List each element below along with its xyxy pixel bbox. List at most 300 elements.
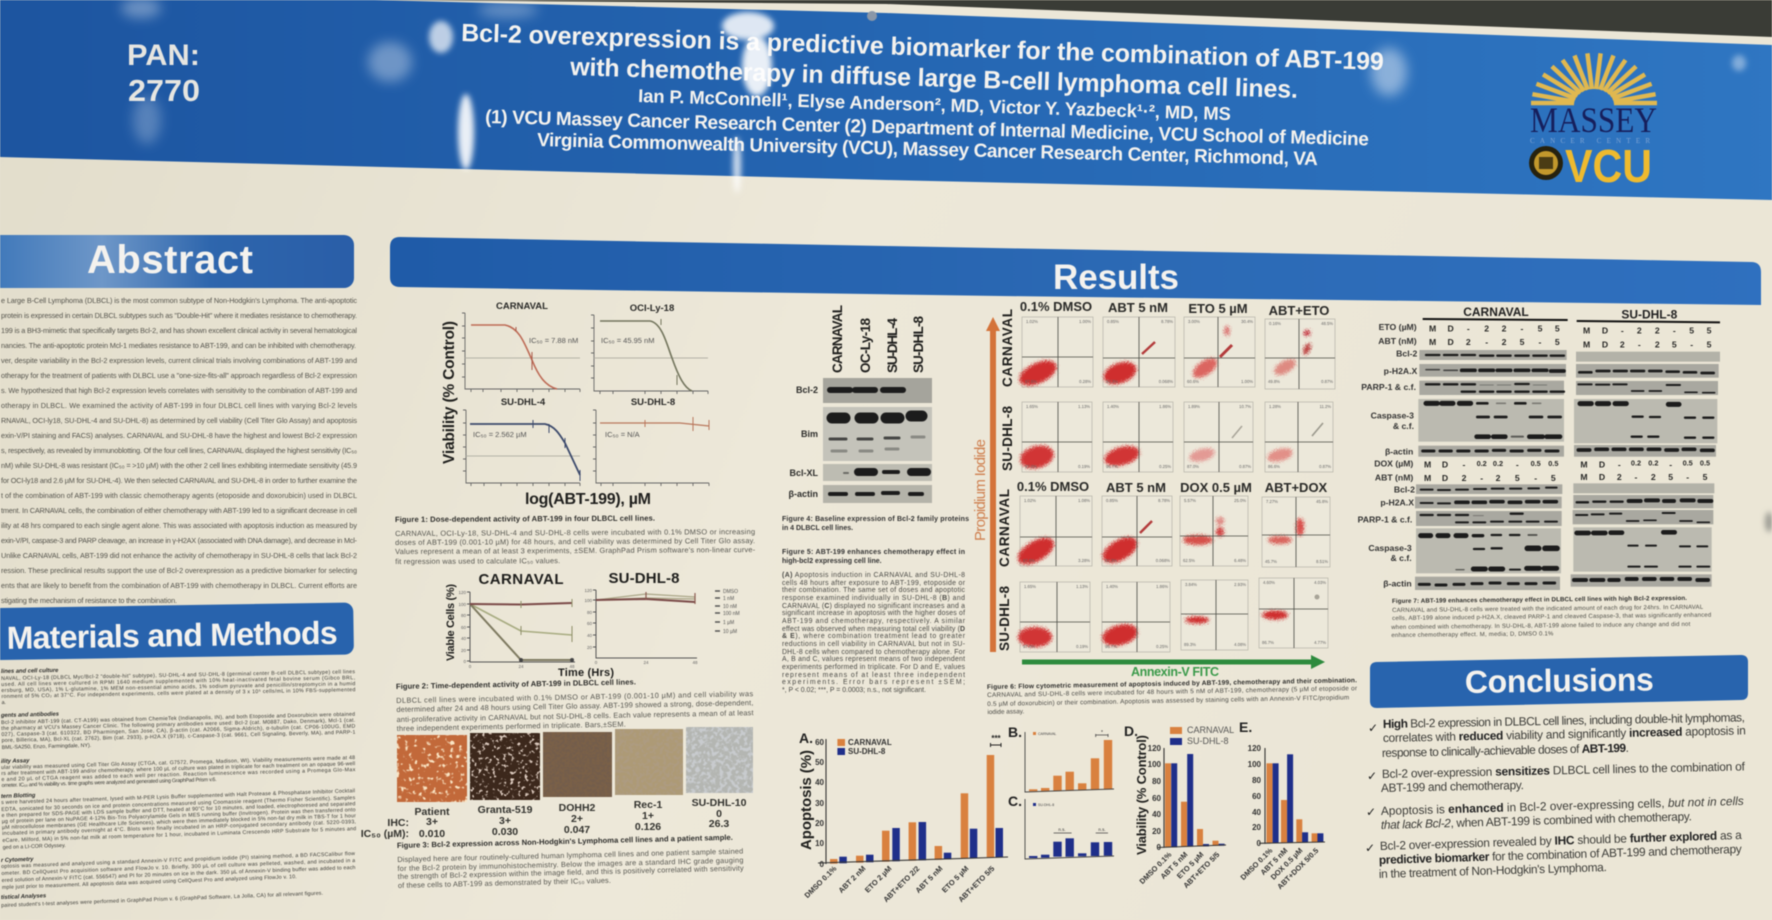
chart: CARNAVAL time course: CARNAVAL	[478, 571, 564, 588]
chart: CARNAVAL time course: 40	[461, 636, 466, 641]
legend	[837, 738, 892, 756]
y ticks: 120	[1148, 744, 1162, 753]
conclusion 2: ABT-199 and chemotherapy.	[1381, 778, 1524, 795]
conference abstract number: PAN:	[127, 39, 200, 72]
top row labels: ABT (nM)	[1378, 336, 1417, 346]
title banner	[0, 0, 1772, 200]
bands top left	[1423, 355, 1564, 451]
IHC image: Granta-519	[470, 733, 540, 800]
group headers: SU-DHL-8	[1621, 307, 1678, 321]
methods: reagents: BML-SA250, Enzo, Farmingdale, NY).	[2, 743, 91, 751]
legend	[715, 589, 740, 635]
plot: CARNAVAL ABT DOX row: 82.3%	[1105, 558, 1117, 563]
plot: CARNAVAL DOX: 25.0%	[1234, 498, 1246, 503]
plot: CARNAVAL ABT+DOX	[1262, 497, 1330, 567]
plot: CARNAVAL DMSO ETO row: 1.02%	[1026, 319, 1038, 324]
chart: CARNAVAL time course: 0	[469, 664, 472, 669]
methods: flow cytometry: optosis was measured and analyzed using a standard Annexin-V FITC and propidium iodide (PI) staining method, a BD FACSCalibur flow	[1, 851, 355, 870]
figure 6: flow cytometry	[972, 299, 1358, 716]
plot: CARNAVAL ABT+DOX: 7.27%	[1266, 499, 1278, 504]
figure 5 description: & E), where combination treatment lead to greater	[782, 633, 966, 640]
plot: CARNAVAL DMSO ETO row: 0.28%	[1079, 379, 1091, 384]
chart: CARNAVAL time course	[458, 571, 575, 669]
bottom drug dose table: 0.2	[1493, 459, 1503, 468]
legend: 10 nM	[723, 604, 737, 610]
plot: SU-DHL-8 ETO: 10.7%	[1239, 404, 1251, 409]
figure 4 caption: in 4 DLBCL cell lines.	[782, 525, 853, 532]
methods: cell lines: NAVAL, OCI-Ly-18 (DLBCL Myc/Bcl-2 "double-hit" subtype), SU-DHL-4 and SU-DHL-8 (germinal center B-cell DLBCL subtype) cell lines	[1, 669, 355, 682]
bottom row labels: p-H2A.X	[1380, 498, 1414, 508]
bottom drug dose table: 0.2	[1648, 459, 1658, 468]
x labels: DOX 0.5 µM	[1269, 846, 1304, 882]
bottom drug dose table	[1424, 459, 1710, 483]
abstract body text: Unlike CARNAVAL cells, ABT-199 did not enhance the activity of chemotherapy in SU-DHL-8 cells that lack Bcl-2	[1, 551, 357, 560]
IHC table labels: 0	[716, 808, 722, 820]
plot: CARNAVAL ABT+DOX: 8.51%	[1316, 559, 1328, 564]
abstract body text: nancies. The anti-apoptotic protein Mcl-1 mediates resistance to ABT-199, and can be inhibited with chemotherapy.	[1, 341, 356, 350]
conclusion 4: Bcl-2 over-expression revealed by IHC should be further explored as a	[1380, 828, 1742, 853]
figure 3 caption: the strength of Bcl-2 expression within the image field, and this is positively correlated with sensitivity	[398, 864, 744, 881]
plot: CARNAVAL ABT: 92.3%	[1106, 379, 1118, 384]
bottom row labels: PARP-1 & c.f.	[1358, 515, 1412, 525]
y ticks: 100	[1148, 760, 1162, 769]
check marks: ✓	[1367, 769, 1377, 783]
top row labels: β-actin	[1385, 446, 1413, 456]
y ticks: 0	[820, 860, 825, 869]
chart: SU-DHL-8 time course: 20	[587, 645, 592, 650]
heading: conclusions: Conclusions	[1465, 661, 1654, 700]
figure 3 caption: for the Bcl-2 protein by immunohistochemistry. Below the images are a standard IHC grade gauging	[397, 856, 744, 873]
plot: CARNAVAL ABT DOX row: 8.78%	[1158, 498, 1170, 503]
check marks: ✓	[1365, 841, 1375, 855]
methods: flow cytometry: mple just prior to measurement. All apoptosis data was acquired using CellQuest Pro and analyzed using FlowJo v. 10.	[2, 874, 297, 891]
y ticks: 0	[1257, 839, 1262, 848]
dark wall behind poster	[375, 0, 1772, 37]
figure 4 caption: Figure 4: Baseline expression of Bcl-2 family proteins	[782, 516, 969, 523]
blot: Bim	[823, 407, 932, 461]
legend: DMSO	[723, 589, 738, 595]
poster title: Bcl-2 overexpression is a predictive biomarker for the combination of ABT-199	[461, 19, 1384, 76]
plot: CARNAVAL ABT DOX row: 0.068%	[1156, 558, 1170, 563]
plot: CARNAVAL DOX: 6.48%	[1234, 558, 1246, 563]
methods: western blotting: tern Blotting	[1, 793, 36, 800]
plot: SU-DHL-8 DOX: 89.3%	[1184, 642, 1196, 647]
figure 5 description: cells 48 hours after exposure to ABT-199, etoposide or	[782, 580, 966, 587]
heading: conclusions	[1370, 655, 1748, 708]
chart: SU-DHL-4: SU-DHL-4	[501, 397, 546, 408]
conclusion 1: response to clinically-achievable doses of ABT-199.	[1382, 741, 1629, 760]
bottom drug dose table: 0.5	[1683, 459, 1693, 468]
plot: SU-DHL-8 ETO	[1184, 402, 1253, 472]
plot: SU-DHL-8 ETO: 1.89%	[1188, 404, 1200, 409]
blot: Bcl-2	[823, 378, 932, 403]
legend: 100 nM	[723, 611, 740, 617]
x axis label: log(ABT-199), µM	[525, 491, 651, 508]
chart: CARNAVAL time course: 120	[458, 590, 466, 595]
plot: SU-DHL-8 ABT+DOX: 4.77%	[1314, 640, 1326, 645]
bottom drug dose table: 0.5	[1531, 459, 1541, 468]
check marks: ✓	[1368, 721, 1378, 735]
heading: materials and methods: Materials and Methods	[6, 615, 338, 656]
figure 6 caption: iodide assay.	[987, 708, 1025, 716]
plot: SU-DHL-8 ABT+ETO: 1.28%	[1269, 404, 1281, 409]
plot: SU-DHL-8 ABT: 96.7%	[1106, 464, 1118, 469]
chart: SU-DHL-8: SU-DHL-8	[631, 397, 675, 408]
row labels: SU-DHL-8	[997, 586, 1012, 651]
glare on lamination	[121, 0, 1746, 193]
plot: CARNAVAL DMSO DOX row: 1.02%	[1024, 498, 1036, 503]
methods: viability assay: rs after treatment with ABT-199 and/or chemotherapy, where 100 µL of culture was plated in triplicate for each treatment on an opaque 96-well	[1, 761, 355, 777]
y ticks: 0	[1157, 843, 1162, 852]
chart: SU-DHL-8: IC₅₀ = N/A	[605, 430, 640, 439]
figure 5 description: ABT-199 and chemotherapy, respectively. A similar	[782, 618, 966, 625]
methods: western blotting: EDTA, sonicated for 30 seconds on ice and protein concentrations measured using Coomassie reagent (Thermo Fisher Scientific). Samples	[1, 795, 356, 813]
IHC image: patient	[397, 735, 467, 802]
logo: Massey sunburst	[1531, 53, 1657, 103]
panel: materials and methods	[0, 602, 357, 909]
conclusion 2	[1381, 759, 1746, 795]
x labels: DMSO 0.1%	[803, 864, 839, 900]
methods: viability assay: ometer. IC₅₀ and % viability vs. time graphs were analyzed and generated using GraphPad Prism v.6.	[2, 777, 217, 789]
figure 5 caption	[782, 549, 966, 694]
chart: SU-DHL-8 time course: 24	[643, 660, 649, 665]
chart B: CARNAVAL bars: B.	[1008, 724, 1022, 740]
methods: cell lines: ronment of 5% CO₂ at 37°C. For independent experiments, cells were plated at a density of 3 x 10⁵ cells/mL in 10% FBS-supplemented	[1, 687, 355, 700]
x labels: ABT+ETO 2/2	[881, 864, 921, 904]
plot: CARNAVAL ABT	[1101, 317, 1175, 388]
bottom drug dose table: 0.2	[1631, 459, 1641, 468]
IHC table labels: 1+	[642, 810, 654, 822]
legend: CARNAVAL	[848, 738, 892, 747]
chart: CARNAVAL time course: 100	[458, 602, 466, 607]
methods: western blotting: ged on a LI-COR Odyssey.	[3, 843, 66, 851]
legend: 10 µM	[723, 629, 737, 635]
figure 5 caption: high-bcl2 expressing cell line.	[782, 558, 882, 565]
poster title	[461, 19, 1384, 104]
authors and affiliations: Virginia Commonwealth University (VCU), Massey Cancer Research Center, Richmond, VA	[537, 130, 1318, 170]
blot strips top right	[1574, 352, 1720, 457]
plot: SU-DHL-8 DMSO ETO row: 1.65%	[1026, 404, 1038, 409]
top drug dose table: MD-22-55	[1429, 324, 1560, 334]
plot: SU-DHL-8 ABT+DOX: 4.03%	[1314, 580, 1326, 585]
row labels: SU-DHL-8	[1000, 406, 1015, 471]
figure 2 caption	[396, 675, 754, 733]
axes	[818, 739, 1008, 864]
plot: CARNAVAL DOX: 62.5%	[1183, 558, 1195, 563]
plot: SU-DHL-8 ABT+DOX: 86.7%	[1262, 640, 1274, 645]
x labels: ABT+ETO 5/5	[1181, 850, 1221, 890]
x labels: ABT+DOX 5/0.5	[1275, 846, 1320, 891]
blot strips top left	[1418, 350, 1567, 457]
x axis label: Time (Hrs)	[558, 667, 614, 679]
check marks: ✓	[1366, 805, 1376, 819]
plot: CARNAVAL DMSO DOX row: 1.08%	[1078, 498, 1090, 503]
chart: CARNAVAL time course: 48	[569, 664, 575, 669]
figure 5 description: effect was observed when measuring total cell viability (D	[782, 626, 965, 633]
top row labels: ETO (µM)	[1379, 322, 1417, 332]
y ticks: 40	[1252, 808, 1262, 817]
figure 2 caption: DLBCL cell lines were incubated with 0.1% DMSO or ABT-199 (0.001-10 µM) and cell viability was	[396, 689, 754, 705]
plot: SU-DHL-8 DMSO DOX row: 97.0%	[1023, 644, 1035, 649]
y axis label: Viability (% Control)	[1134, 735, 1149, 855]
methods: viability assay	[1, 749, 356, 789]
x labels: ETO 2 µM	[863, 864, 893, 895]
group headers: CARNAVAL	[1463, 305, 1529, 319]
figure 7 caption: enhance chemotherapy effect. M, media; D, DMSO 0.1%	[1391, 631, 1554, 639]
IHC table labels	[361, 797, 747, 840]
bottom row labels: DOX (µM)	[1374, 459, 1413, 469]
bottom drug dose table: 0.5	[1548, 459, 1558, 468]
bands top right	[1578, 371, 1715, 450]
figure 7 caption: CARNAVAL and SU-DHL-8 cells were treated with the indicated amount of each drug for 24hrs. In CARNAVAL	[1392, 605, 1704, 614]
methods: viability assay: e and 20 µL of CTGA reagent was added to each well per reaction. Reaction luminescence was recorded using a Promega Glo-Max	[1, 767, 356, 783]
plot: CARNAVAL ABT+ETO: 48.5%	[1321, 321, 1333, 326]
bottom drug dose table: MD-	[1424, 460, 1466, 470]
methods: reagents: the pharmacy at VCU's Massey Cancer Clinic. The following primary antibodies were used: Bcl-2 (cat. M0887, Dako, Denmark), Mcl-1 (cat.	[1, 718, 355, 732]
column titles	[1017, 299, 1329, 495]
check marks	[1365, 721, 1378, 855]
conclusion 4: predictive biomarker for the combination of ABT-199 and chemotherapy	[1379, 842, 1742, 867]
logo: VCU seal	[1529, 146, 1563, 180]
methods: flow cytometry	[1, 845, 356, 891]
plot: SU-DHL-8 ABT	[1102, 402, 1173, 472]
top row labels: & c.f.	[1393, 421, 1414, 431]
y ticks: 100	[1248, 760, 1262, 769]
logo: VCU wordmark: VCU	[1565, 140, 1652, 192]
plot: SU-DHL-8 ABT+ETO: 11.2%	[1319, 404, 1331, 409]
plot: CARNAVAL ABT+ETO: 0.87%	[1321, 379, 1333, 384]
methods: flow cytometry: r Cytometry	[1, 857, 34, 864]
bottom drug dose table: MD2-25-5	[1580, 472, 1708, 482]
poster title: with chemotherapy in diffuse large B-cell lymphoma cell lines.	[569, 53, 1298, 104]
figure 7 caption: when combined with chemotherapy. In SU-DHL-8, ABT-199 alone failed to induce any change and did not	[1390, 622, 1691, 631]
plot: SU-DHL-8 DOX: 4.08%	[1234, 642, 1246, 647]
authors and affiliations: (1) VCU Massey Cancer Research Center (2) Department of Internal Medicine, VCU School of Medicine	[485, 107, 1369, 150]
logo: Massey wordmark: CANCER CENTER	[1530, 137, 1650, 145]
chart: SU-DHL-4: IC₅₀ = 2.562 µM	[473, 430, 527, 439]
y ticks: 20	[815, 819, 825, 828]
x labels: ABT 5 nM	[1159, 850, 1189, 881]
cell line labels: CARNAVAL	[830, 305, 845, 373]
methods: western blotting: µg of protein per lane on NuPAGE 4-12% Bis-Tris Polyacrylamide Gels in MES running buffer (Invitrogen). Protein was then transferred onto	[2, 807, 356, 825]
y ticks: 40	[1152, 810, 1162, 819]
authors and affiliations	[485, 85, 1369, 170]
IHC image: SU-DHL-10	[686, 727, 753, 793]
methods: reagents: Bcl-2 inhibitor ABT-199 (cat. CT-A199) was obtained from ChemieTek (Indianapolis, IN), and both Etoposide and Doxorubicin were obtained	[1, 712, 355, 726]
plot: CARNAVAL ETO: 3.00%	[1188, 319, 1200, 324]
figure 5 description: represent means of at least three independent	[782, 672, 965, 679]
plot: CARNAVAL DMSO DOX row: 97.6%	[1023, 558, 1035, 563]
plot: CARNAVAL DMSO ETO row	[1016, 317, 1093, 391]
methods: cell lines: ersburg, MD, USA), 1% L-glutamine, 1% MEM non-essential amino acids, 1% sodium pyruvate and penicillin/streptomycin in a humid	[1, 681, 355, 694]
chart: OCI-Ly-18	[591, 303, 708, 394]
chart: SU-DHL-8 time course: 80	[587, 610, 592, 615]
abstract body text: tment. In CARNAVAL cells, the combination of either chemotherapy with ABT-199 led to a significant decrease in cell	[1, 506, 357, 515]
column titles: DOX 0.5 µM	[1180, 480, 1252, 495]
poster tack	[867, 11, 877, 21]
chart: SU-DHL-8 time course: 120	[584, 588, 592, 593]
conclusion 3: that lack Bcl-2, when ABT-199 is combined with chemotherapy.	[1381, 809, 1692, 832]
chart: SU-DHL-8 time course: 40	[587, 633, 592, 638]
plot: SU-DHL-8 DMSO ETO row: 1.13%	[1078, 404, 1090, 409]
plot: SU-DHL-8 ABT DOX row: 1.86%	[1156, 584, 1168, 589]
cell line labels: SU-DHL-8	[911, 316, 926, 373]
chart: CARNAVAL: IC₅₀ = 7.88 nM	[529, 336, 578, 345]
figure 2 caption: three independent experiments performed in triplicate. Bars,±SEM.	[397, 720, 626, 733]
chart: CARNAVAL time course: 0	[463, 659, 466, 664]
methods: reagents: pore, Billerica, MA), Bcl-XL (cat. 2762), Bim (cat. 2933), p-H2A.X (9718), c-Caspase-3 (cat. 9661, Cell Signaling, Beverly, MA), and PARP-1	[1, 730, 356, 744]
methods: western blotting: incubated in primary antibody overnight at 4°C. Blots were finally incubated in an HRP-conjugated secondary antibody (cat. 5220-0393,	[2, 819, 356, 837]
figure 5 description: experiments performed in triplicate. For D and E, values	[782, 664, 966, 671]
abstract body text: otherapy for the treatment of patients with DLBCL use a "one-size-fits-all" approach regardless of Bcl-2 expression	[1, 371, 357, 380]
column titles: ABT+DOX	[1265, 480, 1328, 495]
methods: flow cytometry: ered solution of Annexin-V FITC (cat. 556547) and PI for 20 minutes on ice in the dark. 350 µL of Annexin-V binding buffer was added to each	[2, 865, 356, 884]
IHC table labels: 0.047	[564, 824, 590, 836]
chart D: viability bars etoposide: D.	[1124, 723, 1138, 739]
abstract body text: for OCI-ly18 and 2.6 µM for SU-DHL-4). We then selected CARNAVAL and SU-DHL-8 in order to further examine the	[1, 476, 357, 485]
methods: western blotting: e then prepared for SDS-PAGE with LDS sample buffer and DTT, heated at 90°C for 10 minutes, and loaded, electrophoresed and separated	[1, 801, 356, 819]
figure 3 caption: Figure 3: Bcl-2 expression across Non-Hodgkin's Lymphoma cell lines and a patient sample.	[397, 833, 733, 850]
figure 2 caption: anti-proliferative activity in CARNAVAL but not SU-DHL-8 cells. Each value represents a mean of at least	[396, 708, 754, 724]
axes	[1158, 748, 1226, 848]
plot: CARNAVAL ABT+DOX: 45.8%	[1316, 499, 1328, 504]
plot: SU-DHL-8 DMSO ETO row: 0.19%	[1078, 464, 1090, 469]
methods: cell lines: a.	[2, 700, 6, 706]
plot: CARNAVAL ABT: 0.068%	[1159, 379, 1173, 384]
y axis label: Apoptosis (%)	[798, 750, 815, 850]
bottom row labels: β-actin	[1383, 579, 1412, 589]
abstract body text: exin-V/PI staining and FACS) analyses. CARNAVAL and SU-DHL-8 have the highest and lowest Bcl-2 expression	[1, 431, 357, 440]
chart D: viability bars etoposide	[1124, 723, 1234, 890]
chart C: SU-DHL-8 bars: n.s.	[1098, 827, 1106, 832]
bars	[1165, 763, 1218, 847]
plot: SU-DHL-8 DMSO ETO row	[1018, 402, 1092, 472]
methods: cell lines: used. All cell lines were cultured in RPMI 1640 medium supplemented with 10% heat-inactivated fetal bovine serum (Gibco BRL,	[1, 675, 355, 688]
plot: CARNAVAL DOX	[1180, 496, 1248, 566]
axes	[1259, 748, 1325, 844]
bottom drug dose table: 0.5	[1700, 459, 1710, 468]
figure 5 description: their combination. The same set of doses and apoptotic	[782, 587, 966, 594]
figure 7 caption: Figure 7: ABT-199 enhances chemotherapy effect in DLBCL cell lines with high Bcl-2 expression.	[1392, 595, 1687, 605]
figure 5 description: CARNAVAL (C) displayed no significant increases and a	[782, 603, 965, 610]
conclusion 4: in the treatment of Non-Hodgkin's Lymphoma.	[1379, 860, 1607, 881]
plot: CARNAVAL ETO	[1184, 317, 1255, 387]
bottom drug dose table: MD-	[1580, 459, 1621, 469]
chart B: CARNAVAL bars: CARNAVAL	[1038, 732, 1056, 736]
plot: SU-DHL-8 ABT+ETO: 86.6%	[1268, 464, 1280, 469]
plot: CARNAVAL DMSO DOX row	[1014, 496, 1092, 570]
plot: CARNAVAL ETO: 30.4%	[1241, 319, 1253, 324]
top drug dose table: MD-22-55	[1583, 326, 1712, 336]
plot: CARNAVAL DMSO ETO row: 97.6%	[1025, 379, 1037, 384]
abstract body text: stigating the mechanism of resistance to the combination.	[1, 596, 177, 605]
plot: SU-DHL-8 ABT DOX row: 0.25%	[1156, 644, 1168, 649]
top row labels: PARP-1 & c.f.	[1361, 382, 1416, 392]
methods: viability assay: ility Assay	[1, 758, 30, 765]
figure 1 caption: doses of ABT-199 (0.001-10 µM) for 48 hours, and cell viability was determined by Cell Titer Glo assay.	[395, 536, 755, 547]
IHC table labels: 3+	[499, 815, 511, 827]
blot labels	[788, 385, 818, 499]
figure 7 caption	[1390, 595, 1711, 639]
abstract body text: ression. These preclinical results support the use of Bcl-2 overexpression as a predictive biomarker for selecting	[1, 566, 357, 575]
bars	[830, 755, 994, 864]
chart C: SU-DHL-8 bars: C.	[1008, 793, 1022, 809]
axis arrow: propidium iodide: Propidium Iodide	[972, 439, 989, 541]
figure 7: western blot panels	[1358, 305, 1720, 590]
legend: SU-DHL-8	[1187, 736, 1229, 746]
chart: CARNAVAL	[462, 301, 580, 392]
y ticks: 120	[1248, 744, 1262, 753]
x labels	[1239, 846, 1320, 891]
chart E: viability bars doxorubicin	[1239, 719, 1325, 891]
plot: SU-DHL-8 ABT: 1.86%	[1159, 404, 1171, 409]
chart: OCI-Ly-18: IC₅₀ = 45.95 nM	[601, 336, 654, 345]
conclusion 3	[1381, 794, 1744, 832]
figure 1 caption: Values represent a mean of at least 3 experiments, ±SEM. GraphPad Prism software's non-linear curve-	[395, 545, 756, 556]
y ticks: 50	[815, 758, 825, 767]
plot: SU-DHL-8 ABT: 1.40%	[1107, 404, 1119, 409]
IHC table labels: SU-DHL-10	[692, 797, 747, 809]
cell line labels	[830, 305, 926, 373]
figure 6 caption: 0.5 µM of doxorubicin) or their combination. Apoptosis was assessed by staining cells with an Annexin-V FITC/propidium	[987, 694, 1349, 708]
chart B: CARNAVAL bars: *	[1101, 730, 1103, 736]
methods: statistics	[1, 883, 323, 909]
legend: 1 nM	[723, 596, 734, 602]
poster tack right edge	[1765, 512, 1772, 532]
chart A: apoptosis bars: A.	[799, 730, 813, 746]
y ticks	[815, 738, 825, 869]
group headers	[1423, 305, 1720, 322]
x labels: ETO 5 µM	[940, 864, 970, 895]
column titles: ETO 5 µM	[1188, 301, 1248, 316]
plot: CARNAVAL ABT: 8.78%	[1161, 319, 1173, 324]
y ticks: 20	[1152, 827, 1162, 836]
plot: CARNAVAL DMSO ETO row: 1.00%	[1079, 319, 1091, 324]
figure 1: dose-response curves	[395, 301, 756, 566]
chart: CARNAVAL time course: 60	[461, 625, 466, 630]
x labels: ETO 5 µM	[1175, 850, 1205, 881]
plot: SU-DHL-8 DMSO DOX row: 0.19%	[1076, 644, 1088, 649]
abstract body text: RNAVAL, OCI-ly18, SU-DHL-4 and SU-DHL-8) as determined by cell viability (Cell Titer Glo Assay) and apoptosis	[1, 416, 357, 425]
y ticks: 60	[815, 738, 825, 747]
methods: western blotting: eCare, Milford, MA) in 5% non-fat milk at room temperature for 1 hour, incubated in Luminata Crescendo HRP Substrate for 5 minutes and	[2, 826, 356, 844]
x labels: ABT 2 nM	[837, 864, 867, 895]
chart B: CARNAVAL bars	[1008, 724, 1114, 792]
chart: OCI-Ly-18: OCI-Ly-18	[630, 303, 674, 314]
plot: SU-DHL-8 ABT+ETO	[1265, 402, 1333, 472]
heading: abstract: Abstract	[87, 238, 253, 282]
chart: CARNAVAL time course: 20	[461, 648, 466, 653]
chart: CARNAVAL time course: 24	[518, 664, 524, 669]
panel: conclusions	[1365, 655, 1748, 881]
abstract body text: ility at 48 hrs compared to each single agent alone. This was associated with apoptosis induction as measured by	[1, 521, 357, 530]
blot labels: β-actin	[788, 489, 818, 499]
conclusion 1: High Bcl-2 expression in DLBCL cell lines, including double-hit lymphomas,	[1383, 710, 1745, 731]
figure 1 caption: CARNAVAL, OCI-Ly-18, SU-DHL-4 and SU-DHL-8 cells were incubated with 0.1% DMSO or increasing	[395, 527, 755, 538]
figure 6 caption	[987, 677, 1358, 716]
figure 5 description: significant increase in apoptosis with the higher doses of	[782, 610, 965, 617]
IHC table labels: 0.126	[635, 821, 661, 833]
plot: SU-DHL-8 ABT DOX row: 1.40%	[1106, 584, 1118, 589]
figure 6 caption: CARNAVAL and SU-DHL-8 cells were incubated for 48 hours with 5 nM of ABT-199, chemotherapy (5 µM of etoposide or	[987, 685, 1358, 699]
x labels	[803, 864, 996, 904]
figure 5 description: experiments. Error bars represent ±SEM;	[782, 679, 965, 686]
bottom row labels: ABT (nM)	[1375, 473, 1413, 483]
figure 5 description: reductions in cell viability in CARNAVAL but not in SU-	[782, 641, 965, 648]
methods: viability assay: ular viability was measured using Cell Titer Glo Assay (CTGA, cat. G7572, Promega, Madison, WI). Viability measurements were made at 48	[1, 755, 355, 771]
plot: CARNAVAL DOX: 5.57%	[1184, 498, 1196, 503]
IHC table labels: 2+	[571, 813, 583, 825]
